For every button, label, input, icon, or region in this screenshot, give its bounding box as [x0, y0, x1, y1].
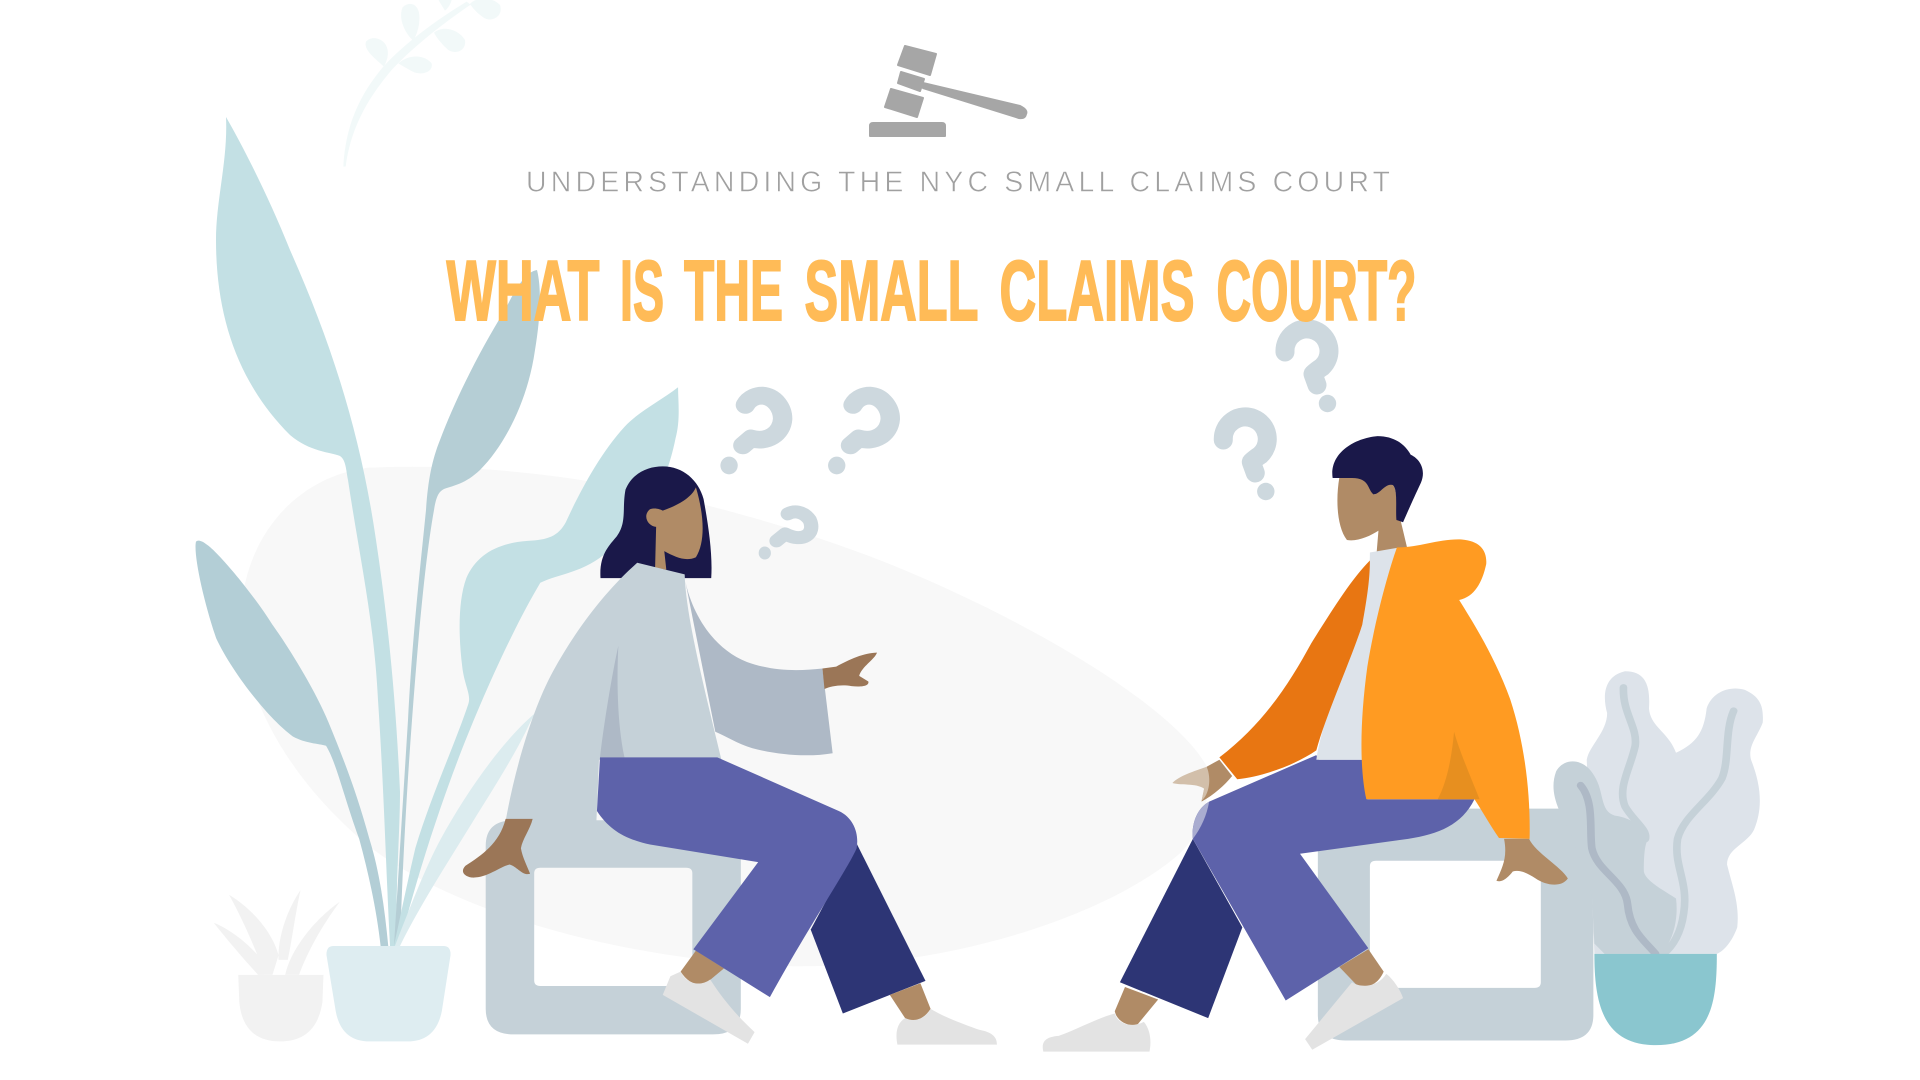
man face: [1337, 478, 1401, 540]
woman resting hand: [463, 819, 533, 878]
woman far sleeve: [685, 578, 833, 755]
sweater fold: [600, 646, 624, 757]
man jacket: [1361, 539, 1530, 839]
light leaf: [1587, 671, 1763, 954]
question marks right: [1223, 329, 1336, 500]
light leaf veins: [1623, 688, 1734, 954]
leaf: upper middle: [394, 270, 540, 946]
woman front leg: [597, 757, 857, 997]
woman back shoe: [896, 1009, 997, 1045]
background blob: [241, 467, 1208, 966]
plant: tall leaves left: [196, 117, 679, 946]
woman back leg: [811, 844, 926, 1013]
man left hand: [1202, 760, 1232, 802]
woman hair: [600, 466, 712, 578]
man neck: [1377, 520, 1407, 554]
man hair: [1332, 436, 1423, 522]
woman back foot: [890, 983, 931, 1020]
jacket fold: [1438, 732, 1480, 799]
decorative sprig top left: [343, 0, 501, 167]
plant pot right: [1594, 954, 1717, 1045]
gavel head lower: [885, 89, 923, 117]
title: CLAIMS: [1000, 244, 1194, 339]
man front leg: [1193, 755, 1474, 1000]
chair right: [1318, 809, 1593, 1040]
woman figure: [463, 466, 997, 1045]
gavel head middle: [898, 72, 924, 91]
right plant: [1553, 671, 1763, 954]
woman front shoe: [663, 972, 755, 1044]
woman pointing hand: [822, 653, 877, 689]
gavel handle: [923, 83, 1026, 118]
question mark upper: [1285, 329, 1336, 412]
man figure: [1043, 436, 1568, 1052]
man back shoe: [1043, 1013, 1150, 1052]
man far sleeve: [1219, 560, 1370, 779]
man front foot: [1339, 949, 1384, 986]
dark leaf vein: [1581, 785, 1656, 954]
woman face: [646, 487, 703, 570]
question marks left: [720, 396, 890, 560]
title: COURT?: [1216, 244, 1416, 339]
man front shoe: [1305, 974, 1403, 1050]
man t-shirt: [1316, 548, 1397, 760]
subtitle: UNDERSTANDING THE NYC SMALL CLAIMS COURT: [526, 166, 1390, 198]
woman front foot: [681, 951, 724, 984]
man back foot: [1115, 987, 1158, 1025]
title: THE: [684, 244, 783, 339]
title: SMALL: [804, 244, 978, 339]
title: IS: [620, 244, 664, 339]
woman sweater: [506, 563, 721, 821]
man right hand: [1496, 839, 1568, 885]
plant pot left: [326, 946, 451, 1041]
gavel base: [870, 123, 945, 136]
small grey plant: [214, 890, 340, 1041]
chair left: [486, 820, 741, 1034]
man left hand pale part: [1172, 767, 1209, 801]
title: WHAT: [446, 244, 600, 339]
gavel head top: [898, 46, 936, 75]
leaves: lower group: [196, 387, 679, 946]
title: [446, 244, 1416, 339]
leaf: large upper left: [216, 117, 400, 946]
man knee highlight: [1193, 802, 1209, 839]
icon: gavel: [870, 46, 1026, 136]
question mark lower: [1223, 417, 1275, 500]
dark leaf: [1553, 761, 1677, 954]
man back leg: [1120, 839, 1242, 1018]
